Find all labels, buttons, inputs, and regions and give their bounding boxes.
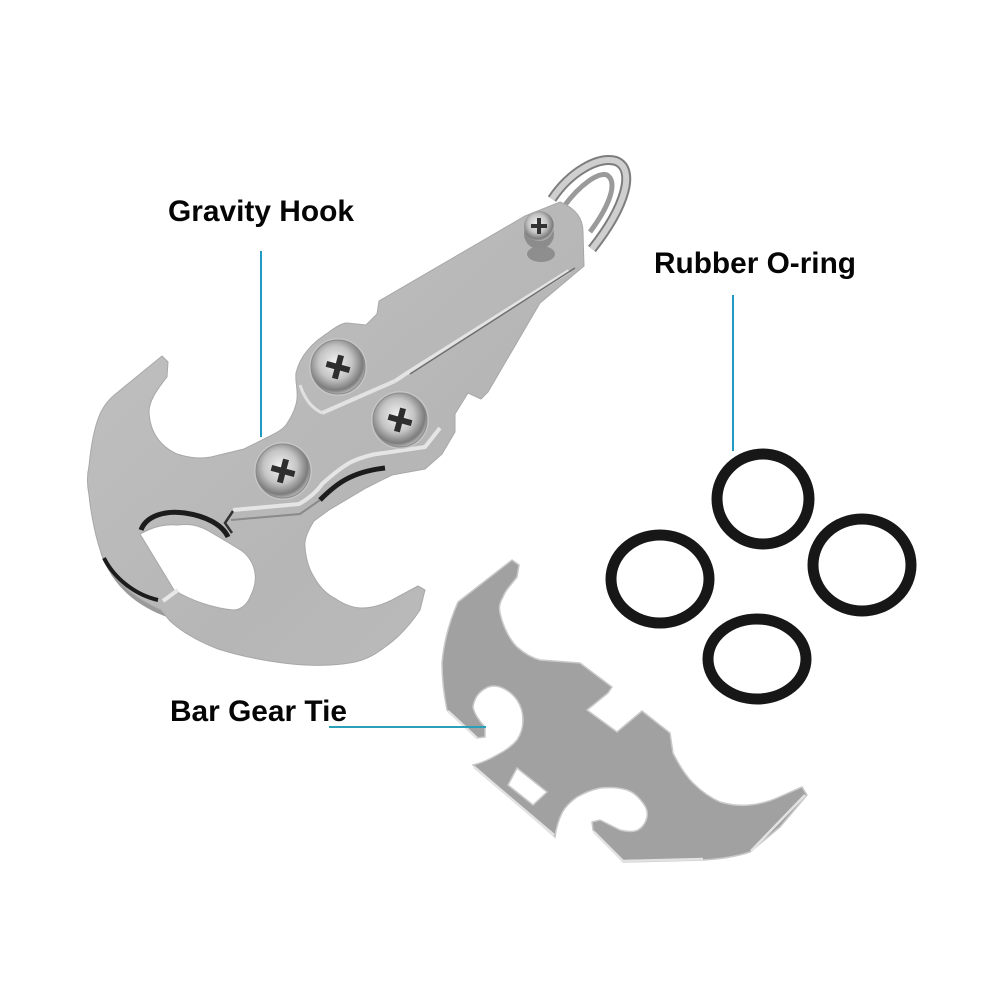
gravity hook bbox=[88, 160, 626, 665]
icon: screw 2 bbox=[371, 391, 429, 449]
tie edge highlights bbox=[448, 711, 805, 861]
rubber o-ring left bbox=[611, 535, 709, 623]
leader line: Rubber O-ring bbox=[732, 295, 734, 451]
icon: small top screw bbox=[524, 211, 555, 262]
leader line: Gravity Hook bbox=[260, 251, 262, 437]
leader line: Bar Gear Tie bbox=[329, 726, 486, 728]
hook body bbox=[88, 202, 584, 665]
black gaps between hook plates bbox=[104, 468, 385, 600]
back plate lower edge bbox=[100, 552, 170, 618]
plate edges bbox=[163, 268, 575, 601]
icon: screw 3 bbox=[254, 442, 312, 500]
icon: screw 1 bbox=[309, 338, 367, 396]
icon: shackle ring bbox=[552, 160, 626, 249]
rubber o-ring top bbox=[717, 454, 809, 544]
label: Bar Gear Tie: Bar Gear Tie bbox=[170, 695, 347, 728]
rubber o-ring right bbox=[813, 519, 911, 611]
rubber o-ring bottom bbox=[708, 619, 806, 699]
label: Rubber O-ring: Rubber O-ring bbox=[654, 247, 856, 280]
bar gear tie bbox=[442, 560, 807, 862]
label: Gravity Hook: Gravity Hook bbox=[168, 195, 354, 228]
